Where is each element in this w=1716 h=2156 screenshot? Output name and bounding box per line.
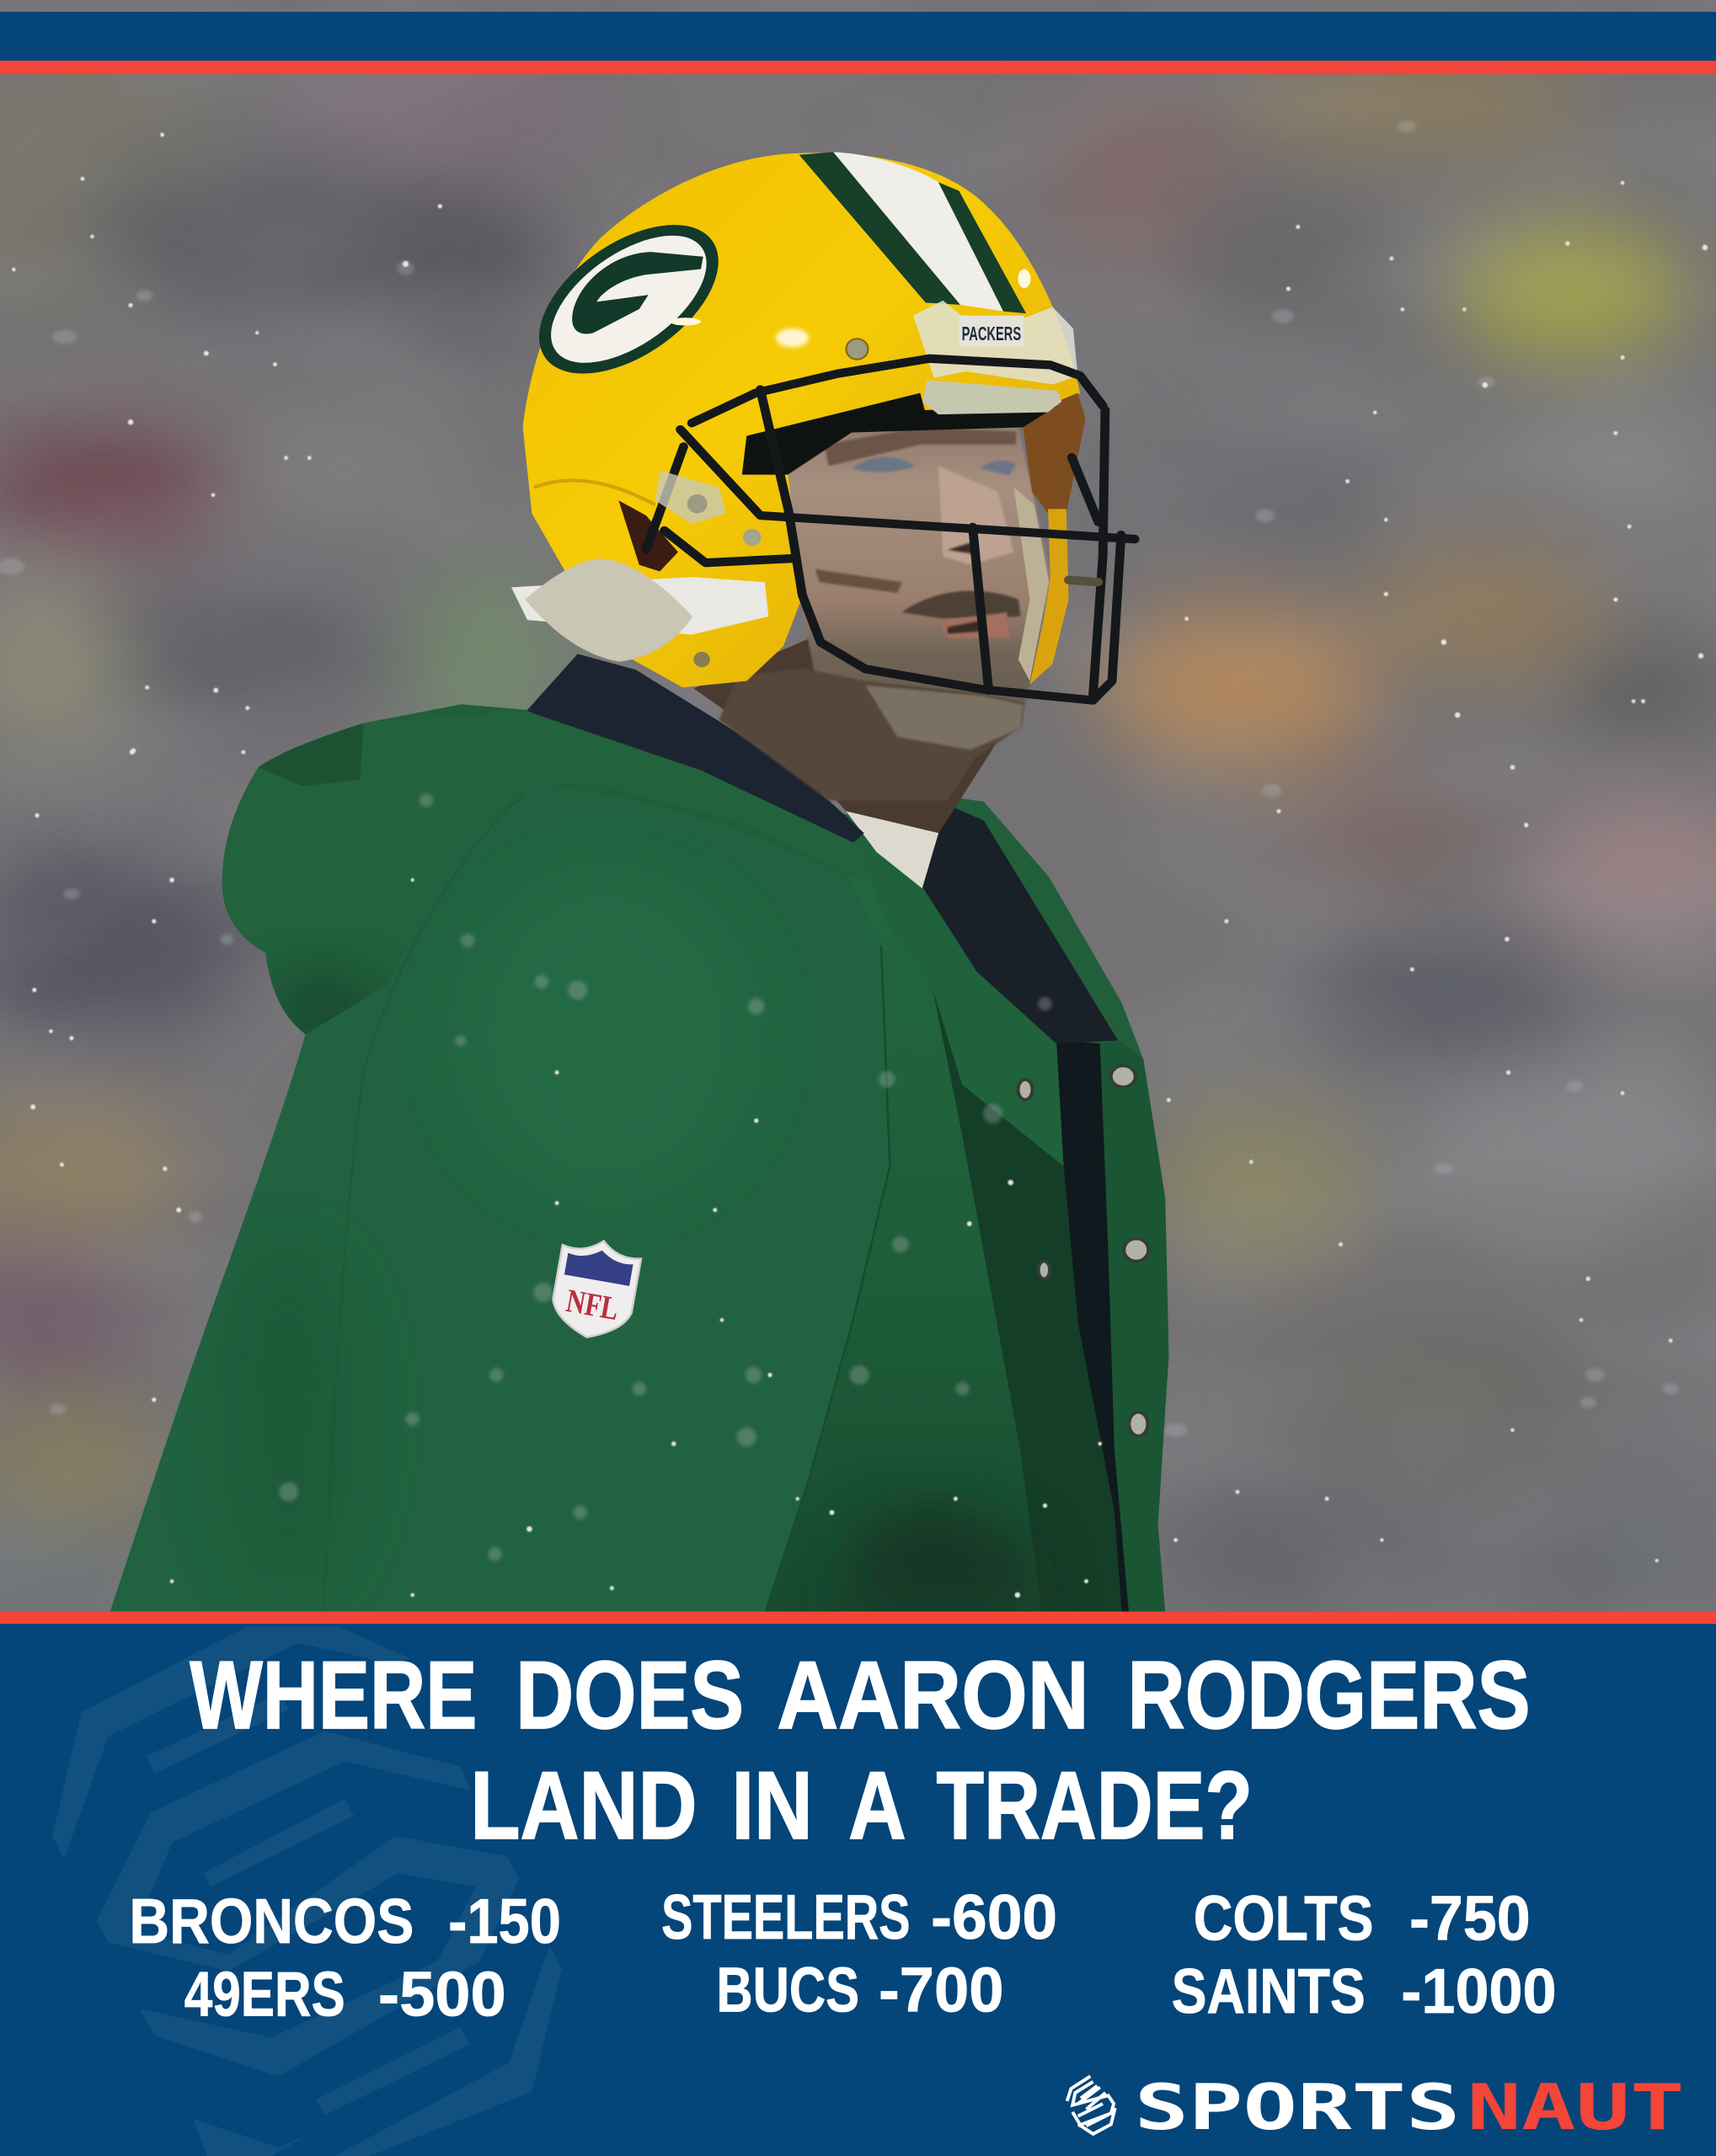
bottom panel: [0, 1611, 1716, 2156]
jacket base: [110, 704, 1168, 1613]
sharp flecks: [12, 133, 1708, 1598]
chin strap: [511, 577, 768, 634]
odds column: Broncos and 49ers: 49ERS: [184, 1958, 345, 2029]
odds column: Colts and Saints: [1172, 1883, 1557, 2026]
lapel: [853, 833, 1064, 1166]
icon: NFL shield patch: [548, 1234, 643, 1344]
facemask: [646, 359, 1135, 701]
logo wordmark: NAUT: [1467, 2070, 1684, 2144]
sleeve: [110, 971, 408, 1612]
odds column: Colts and Saints: -1000: [1401, 1956, 1557, 2026]
ear hole: [618, 500, 678, 571]
odds column: Colts and Saints: SAINTS: [1172, 1956, 1366, 2026]
top red stripe: [0, 61, 1716, 74]
odds column: Broncos and 49ers: BRONCOS: [129, 1886, 414, 1956]
odds column: Colts and Saints: -750: [1409, 1883, 1531, 1954]
title: RODGERS: [1127, 1642, 1531, 1749]
cheek pad: [1013, 488, 1049, 681]
odds column: Steelers and Bucs: -700: [879, 1955, 1004, 2025]
neck beard stubble: [719, 668, 1023, 801]
front panel: [767, 874, 1122, 1613]
side clip: [655, 470, 726, 524]
title: A: [848, 1753, 906, 1860]
top blue band: [0, 12, 1716, 61]
odds column: Broncos and 49ers: [129, 1886, 561, 2029]
dark inner collar: [922, 802, 1118, 1043]
odds column: Broncos and 49ers: -150: [448, 1886, 561, 1956]
Sportsnaut logo: [1067, 2070, 1684, 2144]
watermark logo: [52, 1626, 562, 2156]
helmet ridge line: [534, 480, 655, 504]
snaps: [1018, 1065, 1148, 1436]
G logo: [511, 195, 746, 403]
player head and helmet: [511, 152, 1135, 801]
logo wordmark: [1135, 2070, 1684, 2144]
snap strip: [1100, 1041, 1168, 1613]
odds column: Steelers and Bucs: [661, 1881, 1057, 2025]
title: [190, 1642, 1531, 1860]
odds column: Steelers and Bucs: -600: [931, 1881, 1057, 1952]
odds column: Broncos and 49ers: -500: [378, 1958, 506, 2029]
stripes: [799, 152, 960, 305]
helmet shell: [523, 153, 1080, 687]
bottom dark shadow: [839, 1499, 1042, 1613]
title: DOES: [516, 1642, 744, 1749]
title: IN: [731, 1753, 813, 1860]
visor shadow: [742, 393, 1057, 475]
logo wordmark: SPORTS: [1135, 2070, 1460, 2144]
jacket: [110, 638, 1168, 1613]
background cloud mottling: [0, 0, 1716, 1615]
placket: [933, 990, 1122, 1613]
hood crease: [259, 723, 364, 786]
helmet gold edge: [1029, 509, 1068, 685]
title: LAND: [470, 1753, 698, 1860]
undershirt: [846, 811, 938, 889]
odds column: Steelers and Bucs: STEELERS: [661, 1881, 911, 1952]
title: AARON: [777, 1642, 1089, 1749]
helmet glare: [670, 270, 1030, 347]
panel background: [0, 1623, 1716, 2156]
hood shading: [222, 768, 303, 1033]
nose: [938, 466, 1013, 565]
helmet screws: [846, 339, 868, 360]
inner gap: [1056, 1041, 1129, 1613]
title: WHERE: [190, 1642, 477, 1749]
eyes: [824, 427, 1016, 466]
helmet inner brown edge: [1023, 393, 1086, 514]
sleeve seam: [323, 795, 523, 1613]
front bumper and nameplate: [913, 301, 1077, 414]
front bumper and nameplate: PACKERS: [962, 323, 1021, 345]
face: [783, 419, 1050, 750]
odds column: Steelers and Bucs: BUCS: [716, 1955, 859, 2025]
logo icon: [1067, 2076, 1115, 2134]
chin cup: [525, 558, 692, 662]
snowfall: [0, 121, 1708, 1598]
soft out-of-focus flakes: [0, 121, 1679, 1561]
mask shadow on cheek: [815, 569, 902, 593]
odds column: Colts and Saints: COLTS: [1194, 1883, 1374, 1954]
icon: NFL shield patch: NFL: [564, 1283, 622, 1327]
hair and neck: [693, 638, 1024, 833]
red stripe: [0, 1611, 1716, 1624]
photo background: blurred snowy stadium: [0, 0, 1716, 1615]
title: TRADE?: [937, 1753, 1253, 1860]
black hood collar: [527, 654, 864, 842]
mustache and mouth: [902, 591, 1021, 619]
